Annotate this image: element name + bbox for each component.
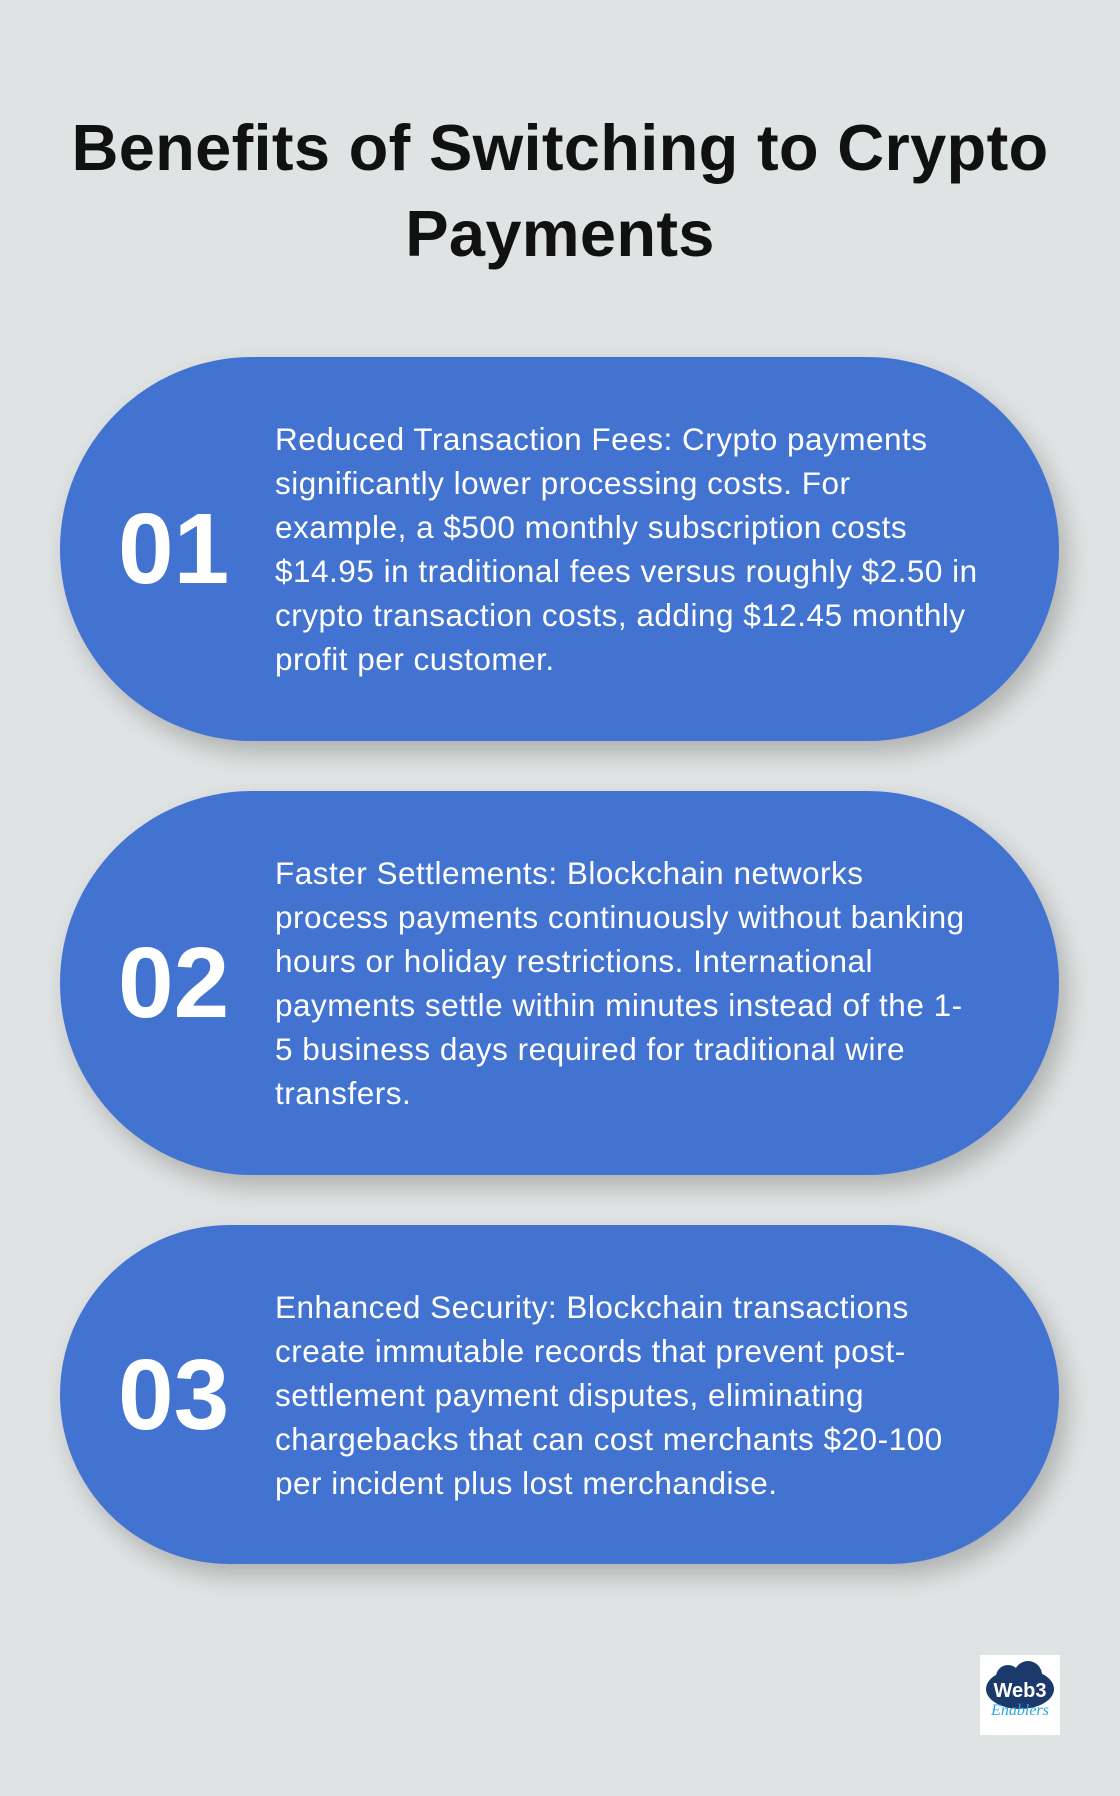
title: Benefits of Switching to Crypto <box>71 111 1049 184</box>
text: reduced fees: crypto transaction costs, adding $12.45 monthly <box>275 597 966 633</box>
text: reduced fees <box>275 421 978 677</box>
text: faster settlements: Faster Settlements: Blockchain networks <box>275 855 863 891</box>
number 03: 03 <box>118 1338 229 1450</box>
text: faster settlements: hours or holiday restrictions. International <box>275 943 873 979</box>
panel: faster settlements <box>60 791 1059 1175</box>
text: enhanced security: create immutable records that prevent post- <box>275 1332 906 1368</box>
number 01: 01 <box>118 493 229 605</box>
text: reduced fees: Reduced Transaction Fees: Crypto payments <box>275 421 928 457</box>
text: reduced fees: significantly lower processing costs. For <box>275 465 850 501</box>
number 02: 02 <box>118 927 229 1039</box>
logo <box>980 1655 1060 1735</box>
logo: Web3 <box>994 1680 1046 1702</box>
text: enhanced security: per incident plus lost merchandise. <box>275 1464 778 1500</box>
title: Payments <box>405 197 715 270</box>
text: enhanced security <box>275 1288 943 1500</box>
text: faster settlements: transfers. <box>275 1075 411 1111</box>
panel: enhanced security <box>60 1225 1059 1564</box>
text: enhanced security: settlement payment disputes, eliminating <box>275 1376 864 1412</box>
text: faster settlements <box>275 855 965 1111</box>
logo: Enablers <box>990 1702 1049 1719</box>
text: faster settlements: 5 business days required for traditional wire <box>275 1031 905 1067</box>
text: reduced fees: $14.95 in traditional fees versus roughly $2.50 in <box>275 553 978 589</box>
text: faster settlements: payments settle within minutes instead of the 1- <box>275 987 963 1023</box>
panel: reduced fees <box>60 357 1059 741</box>
title <box>71 111 1049 270</box>
text: reduced fees: profit per customer. <box>275 641 555 677</box>
text: reduced fees: example, a $500 monthly subscription costs <box>275 509 907 545</box>
text: enhanced security: chargebacks that can cost merchants $20-100 <box>275 1420 943 1456</box>
text: faster settlements: process payments continuously without banking <box>275 899 965 935</box>
text: enhanced security: Enhanced Security: Blockchain transactions <box>275 1288 909 1324</box>
